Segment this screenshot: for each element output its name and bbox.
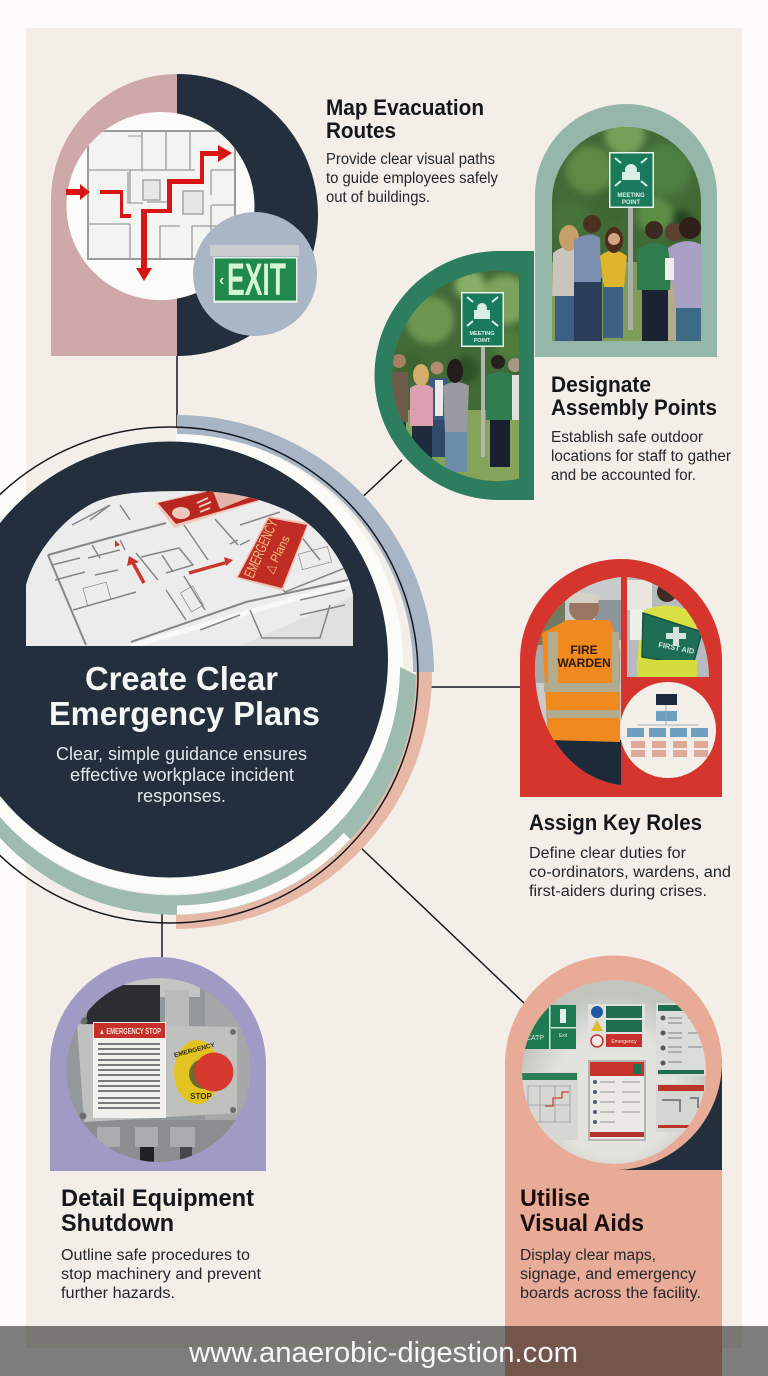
procedure poster bbox=[656, 1003, 706, 1076]
heading: utilise visual aids: Visual Aids bbox=[520, 1210, 644, 1237]
panel: assembly circle, dark green bbox=[374, 251, 534, 500]
hub description: responses. bbox=[137, 786, 226, 806]
meeting point sign: POINT bbox=[622, 200, 640, 206]
text: designate assembly points: and be accounted for. bbox=[551, 467, 696, 484]
text: map evacuation routes: to guide employees safely bbox=[326, 170, 498, 187]
exit sign bbox=[210, 245, 299, 305]
exit sign circle bbox=[193, 212, 317, 336]
text: designate assembly points bbox=[551, 429, 731, 484]
white halo ring bbox=[0, 432, 403, 894]
central hub bbox=[0, 415, 434, 929]
panel: detail equipment shutdown bbox=[50, 957, 266, 1171]
emergency stop button: EMERGENCY bbox=[173, 1042, 216, 1059]
heading: designate assembly points: Designate bbox=[551, 372, 651, 397]
emergency plans sign bbox=[236, 516, 309, 591]
red floor arrows bbox=[133, 562, 228, 583]
text: assign key roles bbox=[529, 845, 731, 900]
hub description: Clear, simple guidance ensures bbox=[56, 744, 307, 764]
panel: assign key roles bbox=[520, 559, 722, 797]
red arch bbox=[520, 559, 722, 797]
exit sign: ‹ bbox=[219, 272, 224, 289]
navy corner bbox=[614, 1060, 722, 1170]
hub description: effective workplace incident bbox=[70, 765, 294, 785]
evacuation map poster bbox=[520, 1072, 578, 1140]
red safety sign bbox=[155, 488, 263, 528]
photo: fire warden bbox=[534, 577, 622, 786]
hub title: Create Clear bbox=[85, 660, 278, 697]
connector: assembly to hub bbox=[354, 460, 402, 505]
peach arch and column bbox=[505, 956, 722, 1376]
panel: assembly arch, light green bbox=[535, 104, 717, 357]
text: utilise visual aids: boards across the facility. bbox=[520, 1285, 701, 1302]
assembly point sign: MEETING bbox=[469, 331, 495, 337]
white map circle bbox=[66, 112, 254, 300]
heading: designate assembly points: Assembly Points bbox=[551, 395, 717, 420]
heading: utilise visual aids: Utilise bbox=[520, 1185, 590, 1212]
photo: safety boards wall bbox=[520, 980, 706, 1164]
text: detail equipment shutdown: Outline safe procedures to bbox=[61, 1247, 250, 1264]
hub description bbox=[56, 744, 307, 806]
blueprint image bbox=[26, 488, 356, 648]
exit signage board: Exit bbox=[559, 1033, 568, 1039]
text: map evacuation routes: out of buildings. bbox=[326, 189, 430, 206]
instruction label: ▲ EMERGENCY STOP bbox=[99, 1027, 161, 1036]
text: map evacuation routes: Provide clear visual paths bbox=[326, 151, 495, 168]
text: map evacuation routes bbox=[326, 151, 498, 206]
people group bbox=[391, 354, 522, 472]
text: assign key roles: co-ordinators, wardens, and bbox=[529, 864, 731, 881]
map notice poster bbox=[656, 1084, 706, 1132]
footer bar: www.anaerobic-digestion.com bbox=[188, 1337, 578, 1369]
red procedure poster bbox=[588, 1060, 646, 1141]
heading: assign key roles: Assign Key Roles bbox=[529, 810, 702, 835]
emergency stop button bbox=[173, 1040, 234, 1104]
assembly point sign bbox=[461, 292, 504, 347]
connector: roles to hub bbox=[418, 686, 522, 688]
meeting point sign: MEETING bbox=[617, 193, 645, 199]
text: designate assembly points: locations for staff to gather bbox=[551, 448, 731, 465]
connector: shutdown to hub bbox=[161, 904, 163, 960]
heading: map evacuation routes: Routes bbox=[326, 118, 396, 143]
heading: map evacuation routes: Map Evacuation bbox=[326, 95, 484, 120]
heading: detail equipment shutdown: Detail Equipment bbox=[61, 1185, 254, 1212]
hub title: Emergency Plans bbox=[49, 695, 320, 732]
heading: detail equipment shutdown: Shutdown bbox=[61, 1210, 174, 1237]
text: designate assembly points: Establish safe outdoor bbox=[551, 429, 703, 446]
purple arch bbox=[50, 957, 266, 1171]
thin black ring bbox=[0, 427, 418, 923]
hazard signage board bbox=[588, 1004, 645, 1050]
text: assign key roles: first-aiders during crises. bbox=[529, 883, 707, 900]
connector: visual aids to hub bbox=[359, 846, 525, 1004]
D shape bbox=[374, 251, 534, 500]
cream upper left area bbox=[26, 425, 176, 663]
pink half shape bbox=[51, 74, 177, 356]
exit signage board bbox=[524, 1005, 576, 1049]
photo: group at assembly point bbox=[390, 270, 530, 481]
emergency plans sign: EMERGENCY bbox=[241, 517, 282, 581]
text: assign key roles: Define clear duties for bbox=[529, 845, 686, 862]
green ring arc bbox=[0, 667, 416, 915]
blue ring arc bbox=[177, 415, 434, 672]
footer bar bbox=[0, 1326, 768, 1376]
org chart circle bbox=[620, 682, 716, 778]
text: utilise visual aids: Display clear maps, bbox=[520, 1247, 656, 1264]
red route arrows bbox=[66, 145, 232, 281]
text: detail equipment shutdown bbox=[61, 1247, 262, 1302]
photo: people at meeting point bbox=[552, 115, 702, 342]
people group bbox=[552, 215, 702, 342]
meeting point sign bbox=[609, 152, 654, 208]
exit signage board: CATP bbox=[526, 1035, 544, 1042]
navy hub circle bbox=[0, 442, 388, 878]
panel: map evacuation routes bbox=[51, 74, 318, 356]
photo: emergency stop box bbox=[66, 977, 255, 1167]
assembly point sign: POINT bbox=[474, 338, 491, 344]
exit sign: EXIT bbox=[227, 254, 286, 305]
emergency plans sign: △ Plans bbox=[262, 533, 293, 575]
photo: fire warden: FIRE bbox=[570, 643, 598, 657]
photo: first aider bbox=[627, 577, 711, 677]
navy half shape bbox=[177, 74, 318, 356]
peach ring arc bbox=[176, 672, 432, 929]
text: detail equipment shutdown: further hazards. bbox=[61, 1285, 175, 1302]
text: detail equipment shutdown: stop machinery and prevent bbox=[61, 1266, 262, 1283]
photo: fire warden: WARDEN bbox=[557, 656, 611, 670]
panel: utilise visual aids bbox=[505, 956, 722, 1376]
photo: first aider: FIRST AID bbox=[658, 640, 696, 656]
arch shape bbox=[535, 104, 717, 357]
instruction label bbox=[93, 1022, 166, 1118]
text: utilise visual aids bbox=[520, 1247, 701, 1302]
hazard signage board: Emergency bbox=[611, 1039, 637, 1045]
emergency stop button: STOP bbox=[190, 1092, 212, 1101]
connector: map to hub bbox=[176, 350, 178, 428]
text: utilise visual aids: signage, and emergency bbox=[520, 1266, 696, 1283]
floor plan bbox=[88, 131, 235, 259]
